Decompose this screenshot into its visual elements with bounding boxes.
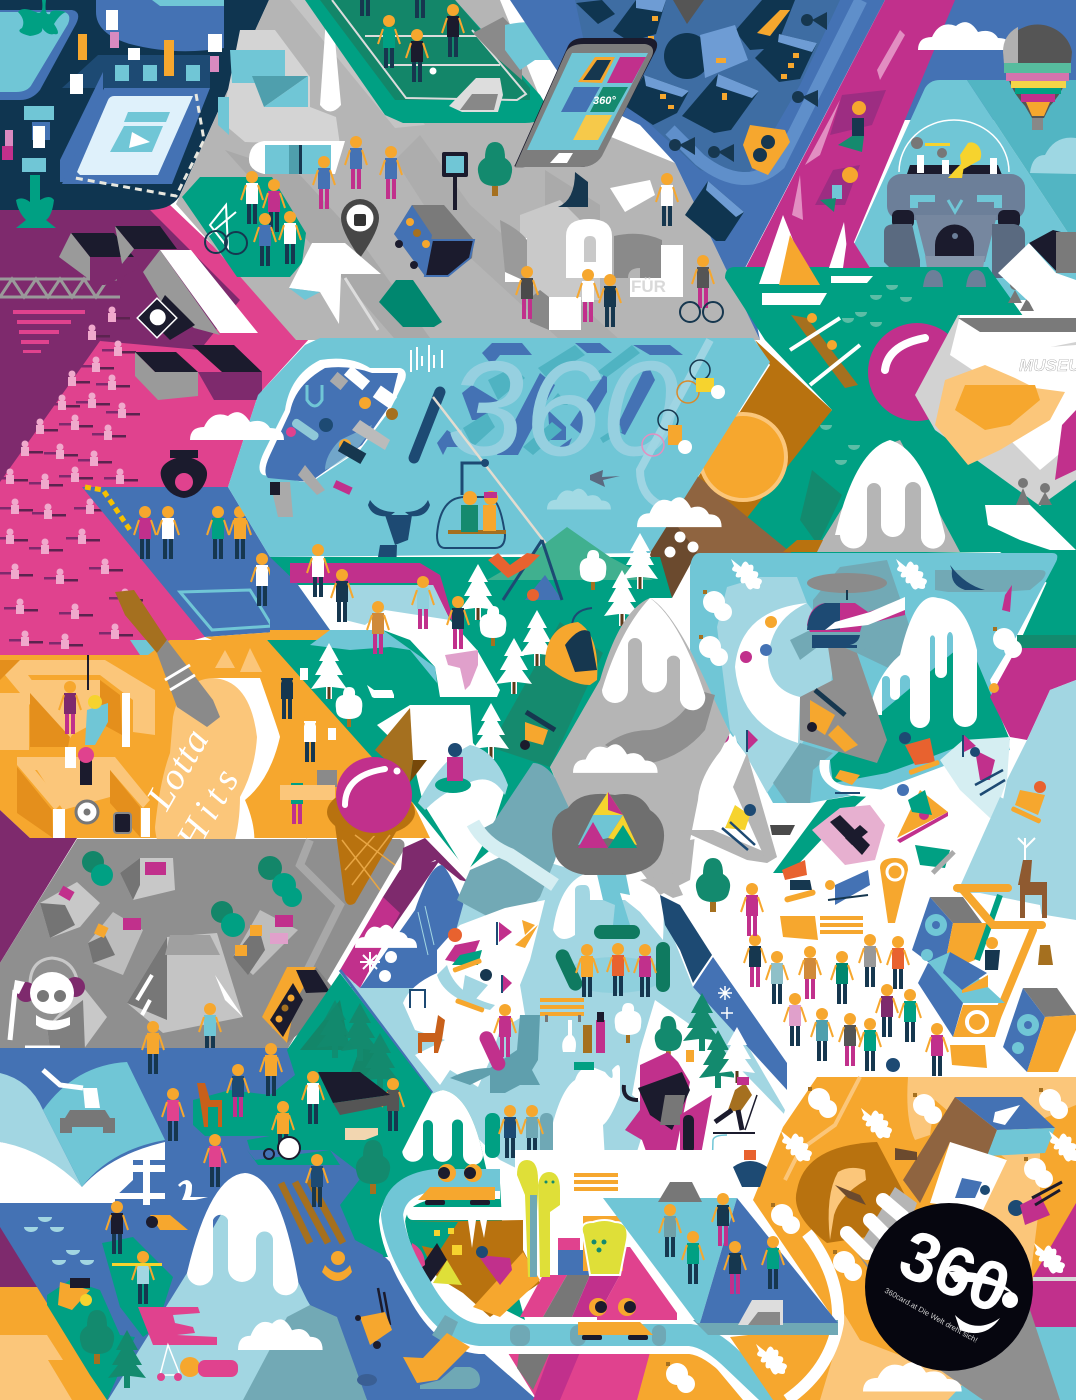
snowboarders (782, 860, 870, 905)
pale cloud (547, 489, 611, 510)
ice cream (327, 757, 415, 905)
boarders (445, 928, 492, 1013)
magenta and blue edge (1033, 1203, 1076, 1277)
snow tufts (699, 559, 1022, 666)
boarder (897, 784, 932, 815)
knife (115, 590, 220, 727)
figures: hanging acrobats (2, 10, 222, 160)
white central mountain (553, 872, 664, 940)
deer (418, 1015, 445, 1053)
bench (574, 1173, 618, 1191)
goat (368, 500, 430, 600)
wheelchair (264, 1101, 300, 1159)
panel: stage (0, 205, 330, 655)
skeleton (10, 958, 85, 1048)
lower bobsled (578, 1298, 653, 1340)
slope balls (699, 616, 999, 783)
buildings (40, 858, 298, 975)
pale crescent (717, 577, 835, 793)
panel: bottom centre runs (380, 1150, 780, 1400)
figures: three skaters (313, 136, 402, 209)
dog (345, 1128, 378, 1140)
panel: snowy forest (267, 527, 672, 870)
goals (658, 1182, 702, 1202)
track (392, 1186, 775, 1400)
wood slats (281, 1180, 343, 1243)
stage truss (0, 279, 120, 297)
arc pale (418, 745, 508, 810)
grey beam (857, 1187, 917, 1250)
pink hand (138, 1307, 217, 1345)
magenta and green corner (1017, 560, 1076, 648)
white curve (787, 1233, 838, 1400)
sun (700, 414, 786, 500)
lightning (596, 870, 630, 935)
panel: top-right mountains and sky (743, 0, 1076, 300)
white wedge (625, 1000, 785, 1190)
crowd at festival (741, 883, 948, 1076)
house (375, 708, 413, 782)
cloud (238, 1319, 323, 1350)
figure (199, 1003, 221, 1056)
panel: green lake and alps (700, 215, 1076, 602)
icon: cinema screen (60, 72, 210, 184)
chair lift (437, 459, 506, 548)
icon: disco pot (161, 450, 207, 498)
rink line (623, 1135, 727, 1178)
hockey rink (603, 1150, 838, 1335)
gate (410, 990, 425, 1008)
snow tufts (666, 1087, 1076, 1393)
figures: group in blob (270, 366, 398, 517)
snow run (298, 585, 500, 697)
swan (178, 1180, 208, 1200)
stage light lines (13, 310, 85, 353)
icon: map pin (341, 199, 379, 258)
round snow trees (336, 550, 606, 727)
text: baguette script: Lotta (138, 722, 217, 817)
deck (60, 1110, 115, 1133)
snow tree (615, 1003, 641, 1043)
snowflakes (718, 986, 733, 1019)
cloud (190, 412, 284, 440)
helicopter (807, 573, 905, 648)
rock block (127, 933, 243, 1033)
white swoosh (819, 760, 885, 797)
green left wedge edge (340, 970, 432, 1093)
skater (445, 650, 478, 690)
white boarder hill (403, 900, 545, 1087)
skate figures (307, 544, 469, 654)
pig (812, 805, 885, 865)
pale mountain (108, 1173, 367, 1400)
lake figures (106, 1021, 404, 1304)
top bobsled (418, 1164, 495, 1205)
car (743, 125, 790, 175)
360 lettering blocks (437, 333, 710, 505)
panel: museum (915, 230, 1076, 550)
chimney (320, 18, 341, 112)
icon: turntable (137, 298, 177, 338)
icon: phone (514, 38, 657, 168)
soccer field (305, 0, 548, 123)
white fingers (847, 1200, 903, 1253)
snowboard crew (553, 925, 670, 997)
flags (705, 730, 976, 822)
grey blob (800, 640, 887, 763)
snowflake (360, 952, 380, 972)
green slope (830, 640, 1010, 783)
white cloud (863, 1362, 962, 1392)
deer icon (1018, 838, 1047, 918)
grey mountain (550, 598, 730, 895)
white ramp (289, 243, 381, 330)
yellow tubes (517, 1160, 560, 1277)
yoga greens (47, 1280, 135, 1400)
panel: 360 band (190, 333, 770, 600)
figures: skate group (516, 172, 723, 327)
orange banner (880, 858, 908, 923)
corner shapes (0, 1227, 37, 1287)
white block with drips (872, 597, 977, 728)
lounge icon (950, 565, 985, 590)
pale base (340, 860, 785, 1190)
fox (367, 685, 394, 698)
skiers (722, 690, 1046, 850)
skier (515, 920, 538, 948)
teal pool and arch (505, 22, 590, 70)
DJ stage (912, 888, 1076, 1072)
low block (47, 987, 107, 1050)
lift cable (433, 397, 570, 575)
orange pads and bench (780, 916, 987, 1068)
snowman and meerkats (562, 1012, 605, 1053)
crowd (0, 306, 143, 649)
lodge (998, 243, 1076, 315)
forest (655, 858, 755, 1088)
green hill (193, 973, 432, 1255)
panel: snow slopes (550, 553, 1076, 1178)
climbers (820, 101, 866, 212)
table figures (276, 666, 337, 824)
halfpipe (500, 170, 683, 330)
panel: orange alp bottom right (666, 1077, 1076, 1400)
buildings (225, 30, 340, 145)
text: 360: 360 (447, 333, 679, 484)
swimmer (146, 1215, 352, 1281)
brown hill (796, 1142, 905, 1243)
panel: food orange (0, 590, 430, 905)
panel: brown ridge (650, 340, 832, 598)
bread (582, 1216, 628, 1275)
white mountain mid (383, 1090, 490, 1185)
snow ribbon (473, 823, 555, 885)
blob (259, 359, 406, 483)
robot (884, 120, 1025, 278)
gondola (249, 141, 345, 174)
lake drops (820, 285, 912, 465)
sailboats (759, 215, 873, 305)
grey mountain with snow cap (815, 440, 960, 552)
studio figures (59, 655, 131, 833)
snowboarder (520, 712, 555, 750)
green bushes (82, 851, 302, 937)
teal hill (457, 763, 570, 930)
houses (576, 0, 817, 241)
street trees (669, 12, 827, 162)
pizza (897, 790, 948, 838)
robot feet (923, 270, 986, 287)
dance floor (82, 487, 330, 640)
stripes below track (500, 1340, 743, 1400)
baguette: Hits (168, 762, 247, 857)
sound bars (410, 345, 443, 372)
helmet icon (545, 608, 597, 685)
magenta run (290, 563, 455, 625)
panel: town blue (510, 0, 885, 340)
badge tagline: 360card.at Die Welt dreht sich! (883, 1286, 979, 1345)
yoga mat (58, 1263, 162, 1310)
bucket (733, 1150, 767, 1187)
badge: 360 card (865, 1203, 1033, 1371)
trees (311, 533, 658, 759)
stripes above track (520, 1238, 677, 1320)
robot (624, 1052, 712, 1170)
icon: lower plant (16, 175, 56, 228)
people at the bench (485, 1105, 553, 1158)
bench (540, 998, 584, 1022)
kayak (791, 315, 858, 388)
rooms (0, 648, 262, 838)
figures: dancers (134, 506, 296, 616)
water marks (24, 1217, 94, 1265)
yellow bus (262, 967, 337, 1043)
teal shapes (813, 560, 922, 675)
cloud (918, 22, 1012, 50)
lower light orange (820, 1290, 975, 1400)
stage boxes (59, 226, 262, 400)
bird (590, 470, 620, 487)
ice ball (868, 323, 966, 421)
balloon (1003, 25, 1072, 130)
deer (197, 1083, 222, 1127)
cross-country skier (713, 1077, 757, 1133)
panel: cinema district (0, 0, 269, 228)
storm cloud (552, 792, 664, 875)
grey house (473, 17, 522, 80)
dance floor corner (270, 557, 330, 630)
baguette (138, 678, 280, 905)
climbers (895, 1148, 1062, 1225)
panel: lake snow (340, 705, 785, 1190)
panel: lakeside blue (0, 973, 537, 1400)
yeti rider (450, 1004, 540, 1093)
icon: tree (478, 142, 512, 196)
panel: city grey (176, 0, 760, 345)
hockey players (659, 1193, 784, 1294)
green wedge (773, 793, 870, 873)
piano (318, 1072, 390, 1115)
white building (903, 1097, 997, 1203)
cave (410, 1220, 540, 1317)
panel: magenta and purple wedge (340, 838, 470, 990)
text: FÜR: FÜR (631, 277, 666, 296)
navy and blue stripe (680, 905, 712, 983)
snowboarder small (435, 743, 471, 793)
ski (414, 392, 440, 458)
book hill (0, 1073, 82, 1187)
swing A-frame (488, 540, 562, 601)
panel: grey bluff left (0, 810, 405, 1056)
white cloud on ridge (637, 497, 722, 527)
flags (497, 922, 512, 993)
brown dots (664, 532, 698, 558)
white run on mountain (690, 735, 745, 840)
diver (355, 1288, 392, 1349)
icon: phone: 360° (593, 95, 616, 107)
sled (157, 1345, 238, 1381)
yeti (550, 1065, 620, 1175)
icon: upper plant (18, 0, 66, 36)
trees (80, 1140, 390, 1388)
icon: bus (394, 205, 474, 276)
white left area (377, 705, 507, 873)
park patch (182, 171, 306, 277)
beaver (1038, 945, 1053, 965)
bikes (642, 360, 710, 456)
icon: bus stop (442, 152, 468, 210)
cloud on mountain (573, 744, 658, 773)
green patch (379, 280, 442, 327)
badge logo: 360 (889, 1215, 1021, 1328)
cloud (355, 925, 417, 948)
lower ramp (403, 1333, 480, 1389)
lamp post (686, 1050, 694, 1062)
white wide base (657, 790, 1076, 1078)
